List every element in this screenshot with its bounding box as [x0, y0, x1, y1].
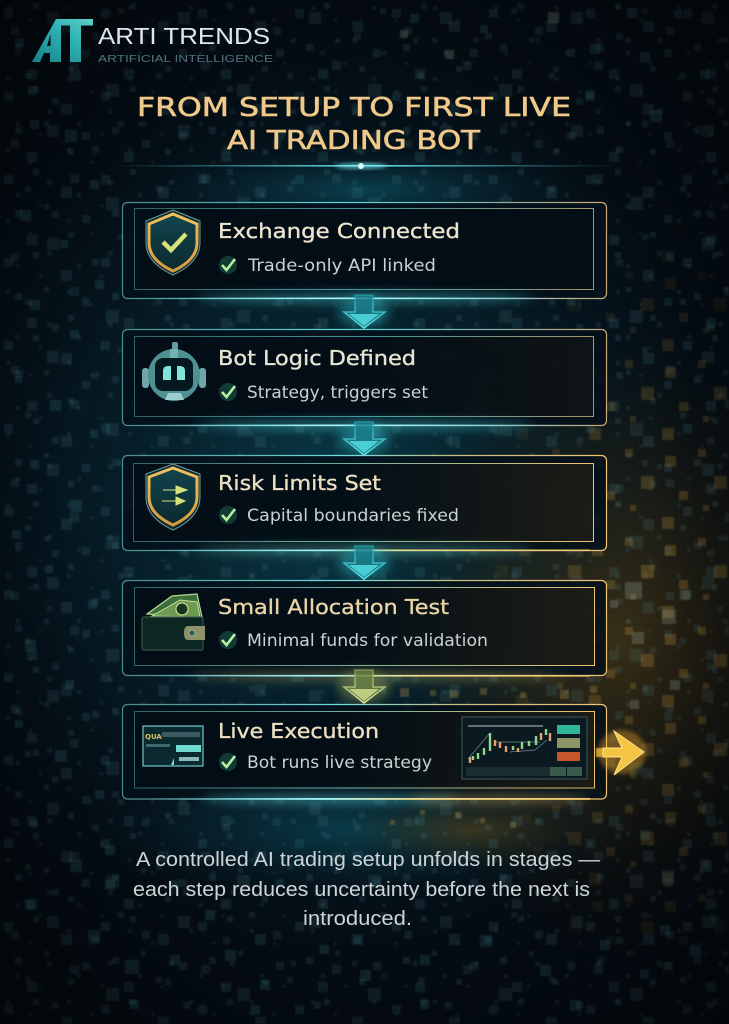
icon: shield with arrows	[146, 464, 200, 530]
logo mark: AT monogram	[32, 19, 93, 62]
logo wordmark: ARTI TRENDS	[98, 23, 270, 49]
check bullet	[219, 631, 237, 649]
panel: risk limits set	[122, 456, 606, 555]
subtext: Minimal funds for validation	[247, 631, 488, 650]
icon: trading terminal	[143, 726, 203, 766]
heading: Live Execution	[218, 719, 379, 743]
closing statement: introduced.	[303, 908, 412, 930]
icon: robot head	[142, 342, 206, 401]
closing statement: A controlled AI trading setup unfolds in stages —	[136, 849, 600, 871]
icon: shield with check	[146, 210, 200, 275]
panel: live execution	[122, 704, 606, 804]
title divider glow	[110, 162, 620, 170]
subtext: Bot runs live strategy	[247, 753, 432, 772]
check bullet	[219, 256, 237, 274]
title	[137, 93, 571, 156]
arrow: step 1 to 2	[338, 295, 390, 328]
check bullet	[219, 383, 237, 401]
title: AI TRADING BOT	[227, 126, 480, 156]
arrow: go live	[596, 730, 646, 775]
subtext: Strategy, triggers set	[247, 383, 429, 402]
logo: Arti Trends	[32, 19, 273, 65]
logo tagline: ARTIFICIAL INTELLIGENCE	[98, 53, 273, 65]
panel: bot logic defined	[122, 330, 606, 430]
subtext: Trade-only API linked	[247, 256, 436, 275]
heading: Exchange Connected	[218, 219, 460, 243]
arrow: step 4 to 5	[338, 670, 390, 703]
chart: trading dashboard	[462, 717, 587, 779]
arrow: step 3 to 4	[338, 546, 390, 579]
subtext: Capital boundaries fixed	[247, 506, 459, 525]
arrow: step 2 to 3	[338, 422, 390, 455]
check bullet	[219, 753, 237, 771]
title: FROM SETUP TO FIRST LIVE	[137, 93, 571, 123]
closing statement	[133, 849, 600, 930]
icon: wallet with cash	[142, 594, 205, 650]
check bullet	[219, 506, 237, 524]
heading: Risk Limits Set	[218, 471, 381, 495]
icon: trading terminal: QUA	[145, 733, 162, 741]
panel: exchange connected	[122, 202, 606, 303]
heading: Bot Logic Defined	[218, 346, 416, 370]
heading: Small Allocation Test	[218, 595, 449, 619]
panel: small allocation test	[122, 580, 606, 681]
closing statement: each step reduces uncertainty before the next is	[133, 879, 590, 901]
